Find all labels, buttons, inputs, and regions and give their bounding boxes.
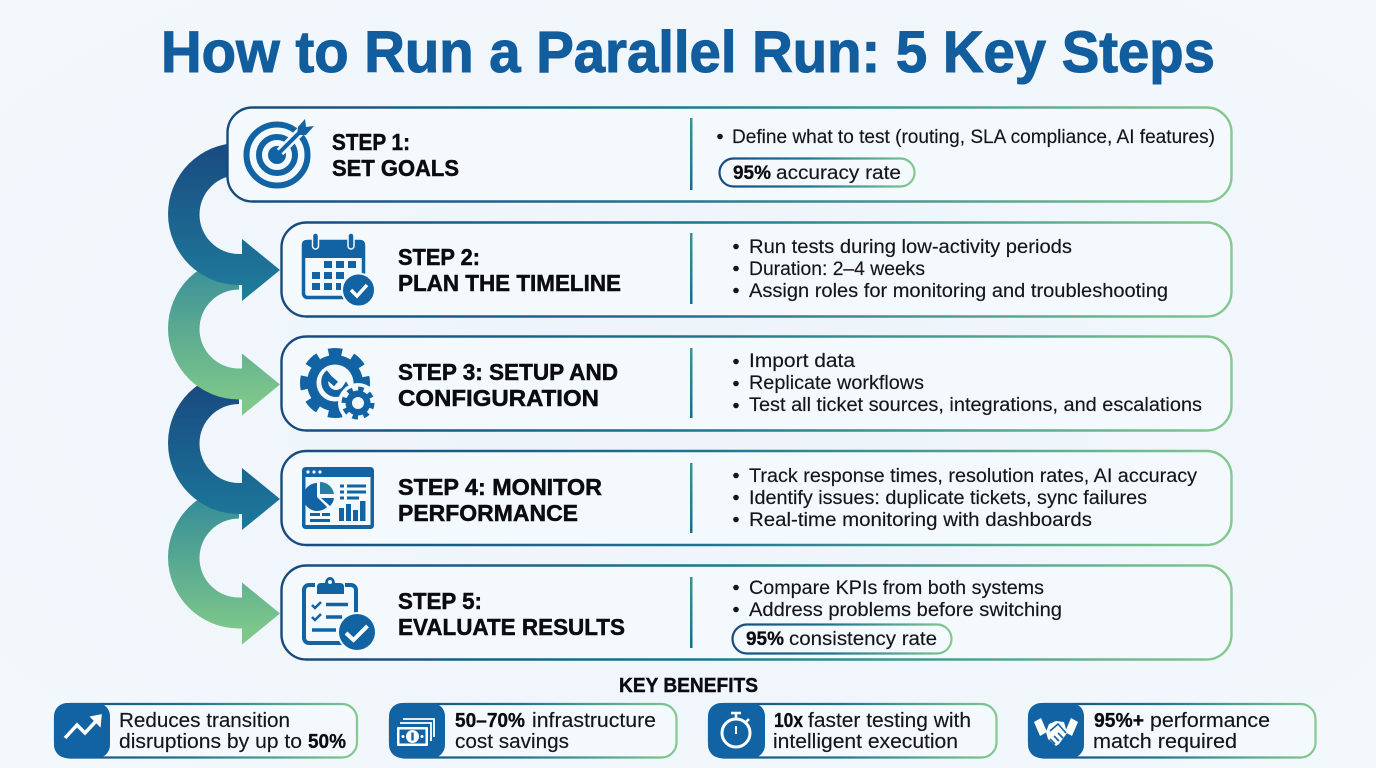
benefit text — [1093, 710, 1270, 753]
benefit text: disruptions by up to — [119, 731, 302, 753]
icon: trend arrow — [54, 703, 110, 758]
benefit: reduces transition disruptions — [54, 703, 357, 758]
bullet text: step 4: Track response times, resolution rates, AI accuracy — [749, 466, 1198, 487]
callout: 95% consistency rate — [732, 624, 952, 654]
bullet text: step 4 — [733, 466, 1198, 531]
arrow: step 2 to step 3 — [168, 258, 280, 416]
bullet text: step 3: Import data — [749, 351, 855, 372]
benefit text: cost savings — [455, 731, 569, 753]
icon: calendar — [302, 233, 375, 306]
icon: target — [246, 119, 314, 186]
benefit: performance match — [1028, 703, 1316, 758]
bullet text: step 1: Define what to test (routing, SLA compliance, AI features) — [732, 127, 1215, 148]
icon: clipboard with check — [304, 577, 377, 652]
heading: key benefits: KEY BENEFITS — [619, 675, 758, 697]
panel: step 3 setup and configuration — [282, 336, 1232, 430]
icon: stopwatch — [708, 703, 765, 758]
bullet text: step 3 — [733, 351, 1202, 416]
heading: step 2: PLAN THE TIMELINE — [398, 270, 621, 296]
benefit text: infrastructure — [532, 710, 656, 732]
heading: step 1: STEP 1: — [332, 129, 410, 155]
icon: dashboard — [302, 467, 374, 529]
heading: step 4: STEP 4: MONITOR — [398, 474, 602, 500]
heading: step 2 — [398, 244, 621, 296]
benefit: faster testing — [708, 703, 996, 758]
icon: gears and wrench — [305, 353, 378, 423]
benefit text: Reduces transition — [119, 710, 290, 732]
benefit text: 10x — [774, 710, 803, 732]
heading: step 1 — [332, 129, 459, 181]
heading: step 3: CONFIGURATION — [398, 385, 599, 411]
heading: step 5 — [398, 588, 625, 640]
bullet text: step 3: Replicate workflows — [749, 373, 924, 394]
heading: step 1: SET GOALS — [332, 155, 459, 181]
bullet text: step 2: Run tests during low-activity periods — [749, 237, 1072, 258]
icon: handshake — [1028, 703, 1084, 758]
benefit text: faster testing with — [808, 710, 971, 732]
benefit text — [773, 710, 971, 753]
benefit text: 50% — [308, 731, 346, 753]
bullet text: step 5 — [733, 578, 1062, 621]
heading: step 4: PERFORMANCE — [398, 500, 578, 526]
arrow: step 4 to step 5 — [168, 486, 280, 644]
heading: step 2: STEP 2: — [398, 244, 480, 270]
icon: banknotes — [389, 703, 445, 758]
bullet text: step 2: Assign roles for monitoring and troubleshooting — [749, 281, 1168, 302]
heading: step 5: EVALUATE RESULTS — [398, 614, 625, 640]
bullet text: step 3: Test all ticket sources, integrations, and escalations — [749, 395, 1202, 416]
panel: step 1 set goals — [228, 108, 1232, 202]
bullet text: step 5: Compare KPIs from both systems — [749, 578, 1044, 599]
panel: step 5 evaluate results — [282, 566, 1232, 660]
callout: 95% accuracy rate — [720, 158, 914, 186]
bullet text: step 5: Address problems before switching — [749, 600, 1062, 621]
benefit text: match required — [1093, 731, 1237, 753]
callout: 95% consistency rate: consistency rate — [789, 629, 937, 650]
benefit text — [119, 710, 346, 753]
bullet text: step 2: Duration: 2–4 weeks — [749, 259, 925, 280]
benefit text: intelligent execution — [773, 731, 958, 753]
benefit: infrastructure cost savings — [389, 703, 676, 758]
benefit text: 50–70% — [455, 710, 525, 732]
heading: step 4 — [398, 474, 602, 526]
panel: step 2 plan the timeline — [282, 222, 1232, 316]
arrow: step 3 to step 4 — [168, 372, 280, 530]
bullet text: step 4: Real-time monitoring with dashboards — [749, 510, 1092, 531]
arrow: step 1 to step 2 — [168, 143, 280, 301]
callout: 95% consistency rate: 95% — [746, 629, 784, 650]
heading: step 3 — [398, 359, 618, 411]
bullet text: step 2 — [733, 237, 1168, 302]
heading: step 5: STEP 5: — [398, 588, 482, 614]
bullet text: step 4: Identify issues: duplicate tickets, sync failures — [749, 488, 1147, 509]
benefit text: 95%+ — [1094, 710, 1144, 732]
benefit text — [455, 710, 656, 753]
benefit text: performance — [1150, 710, 1270, 732]
callout: 95% accuracy rate: accuracy rate — [776, 163, 901, 184]
panel: step 4 monitor performance — [282, 451, 1232, 545]
callout: 95% accuracy rate: 95% — [733, 163, 771, 184]
heading: step 3: STEP 3: SETUP AND — [398, 359, 618, 385]
title: How to Run a Parallel Run: 5 Key Steps — [161, 20, 1215, 85]
